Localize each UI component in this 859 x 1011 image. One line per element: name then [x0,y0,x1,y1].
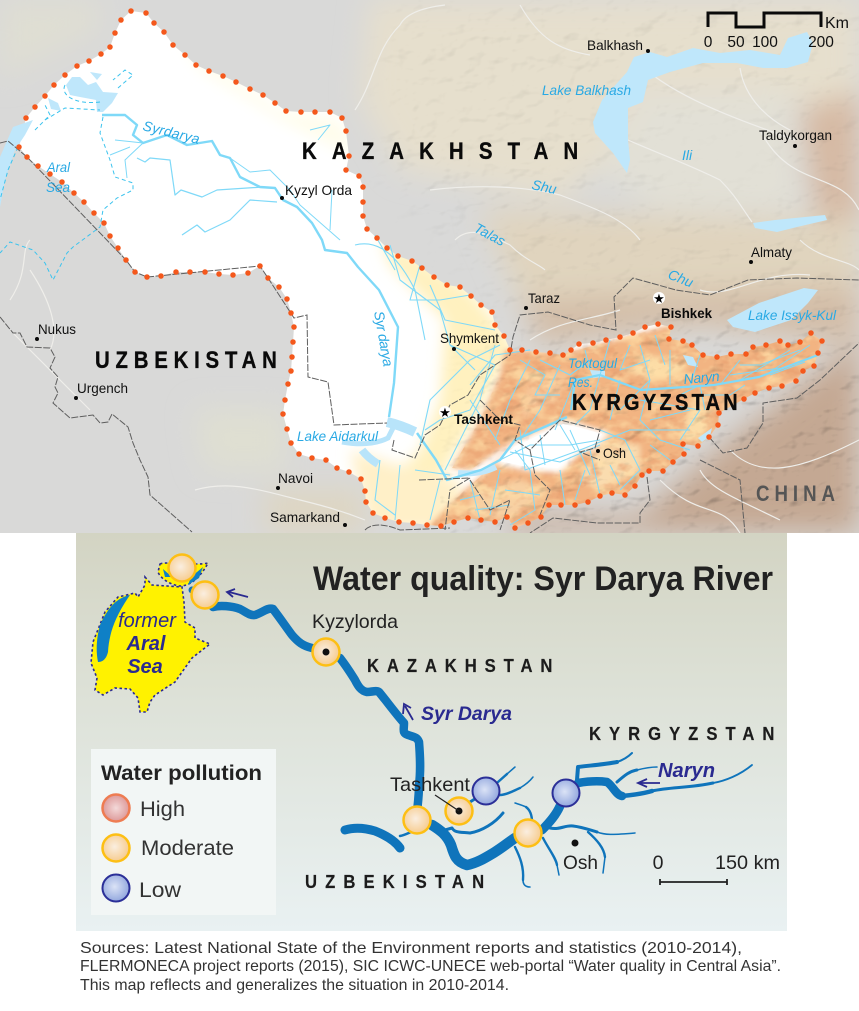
river: Syr Darya [192,590,752,887]
labels: water bodies: Chu [666,266,696,290]
country labels on water quality map: KAZAKHSTAN [367,655,552,676]
national borders [0,141,859,533]
panel: water quality map [76,533,787,931]
river name labels: Syr Darya [421,703,512,725]
scale bar: km: 200 [808,34,834,51]
title: Water quality: Syr Darya River [313,560,773,598]
labels: water bodies: Sea [46,179,70,195]
lake: Kapchagay [753,215,827,232]
panel: basin highlighted area [20,12,821,527]
labels: cities: Taldykorgan [759,127,832,143]
labels: water bodies: Syr darya [371,310,397,368]
labels: cities: ★ [653,292,665,307]
legend: water pollution: High [140,797,185,821]
mountain colour mottling [434,328,818,526]
flow arrows [227,589,660,787]
labels: cities: Nukus [38,321,76,337]
lake: northern Aral [66,77,118,112]
labels: countries on map: UZBEKISTAN [95,346,277,373]
labels: countries on map: KYRGYZSTAN [572,388,738,415]
scale bar: 150 km: 150 km [715,852,780,874]
labels: cities: ★ [439,406,451,421]
former Aral Sea shape [91,563,210,712]
cities on water quality map: Kyzylorda [312,611,398,633]
sources text: FLERMONECA project reports (2015), SIC ICWC-UNECE web-portal “Water quality in Central Asia”. [80,958,781,975]
labels: cities: Taraz [528,290,560,306]
labels: cities: Urgench [77,380,128,396]
labels: water bodies: Syrdarya [141,117,202,147]
cities on water quality map: Osh [563,852,598,874]
labels: water bodies: Talas [472,220,508,249]
scale bar: km: 0 [704,34,713,51]
former Aral Sea shape: Aral [126,633,166,655]
sources text: Sources: Latest National State of the Environment reports and statistics (2010-2014), [80,940,742,957]
labels: cities: Bishkek [661,305,712,321]
river name labels [421,703,715,782]
dashed dry channels [0,70,133,280]
lake: Issyk-Kul [727,288,818,332]
labels: countries on map: KAZAKHSTAN [302,137,578,164]
scale bar: km: 100 [752,34,778,51]
monitoring points: pollution circles [168,554,580,846]
river name labels: Naryn [658,760,715,782]
panel: Syr Darya basin relief map [0,0,859,535]
lake: western Aral [0,120,33,207]
rivers: Syr Darya system [102,115,818,525]
legend: water pollution [91,749,276,915]
labels: water bodies: Lake Aidarkul [297,428,379,444]
labels: water bodies: Ili [682,147,693,163]
labels: countries on map [95,137,835,506]
reservoirs [48,72,712,442]
labels: cities: Balkhash [587,37,643,53]
labels: cities [37,37,832,525]
scale bar: 150 km: 0 [653,852,664,874]
labels: cities: Osh [603,445,626,461]
former Aral Sea shape: former [118,610,177,632]
scale bar: km: Km [825,15,849,32]
labels: cities: Almaty [751,244,792,260]
scale bar: 150 km [653,852,780,885]
labels: water bodies: Toktogul [568,355,618,371]
labels: cities: Tashkent [454,411,513,427]
shaded relief outside the basin [410,16,859,532]
former Aral Sea shape: Sea [127,656,163,678]
lake: Aidarkul [387,422,415,432]
labels: water bodies: Naryn [683,368,720,387]
scale bar: km [704,13,849,51]
labels: water bodies: Res. [568,374,593,390]
labels: water bodies: Lake Issyk-Kul [748,307,837,323]
sources text: This map reflects and generalizes the situation in 2010-2014. [80,977,509,994]
legend: water pollution: Low [139,878,181,902]
labels: water bodies: Lake Balkhash [542,82,631,98]
country labels on water quality map: UZBEKISTAN [305,871,484,892]
country labels on water quality map: KYRGYZSTAN [589,723,774,744]
labels: countries on map: CHINA [756,483,835,506]
cities on water quality map: Tashkent [390,774,471,796]
pale rivers outside the basin [10,5,859,533]
cities on water quality map [312,611,598,874]
labels: cities: Samarkand [270,509,340,525]
labels: water bodies: Aral [46,159,71,175]
sources text [80,940,781,994]
scale bar: km: 50 [727,34,745,51]
legend: water pollution: Water pollution [101,761,262,785]
labels: water bodies: Shu [530,176,558,197]
lake: Balkhash [593,32,813,173]
labels: cities: Kyzyl Orda [285,182,352,198]
basin boundary: orange dots [19,11,822,528]
water bodies: lakes [0,32,827,473]
labels: cities: Navoi [278,470,313,486]
legend: water pollution: Moderate [141,836,234,860]
labels: cities: Shymkent [440,330,499,346]
labels: water bodies [46,82,837,444]
country labels on water quality map [305,655,774,892]
